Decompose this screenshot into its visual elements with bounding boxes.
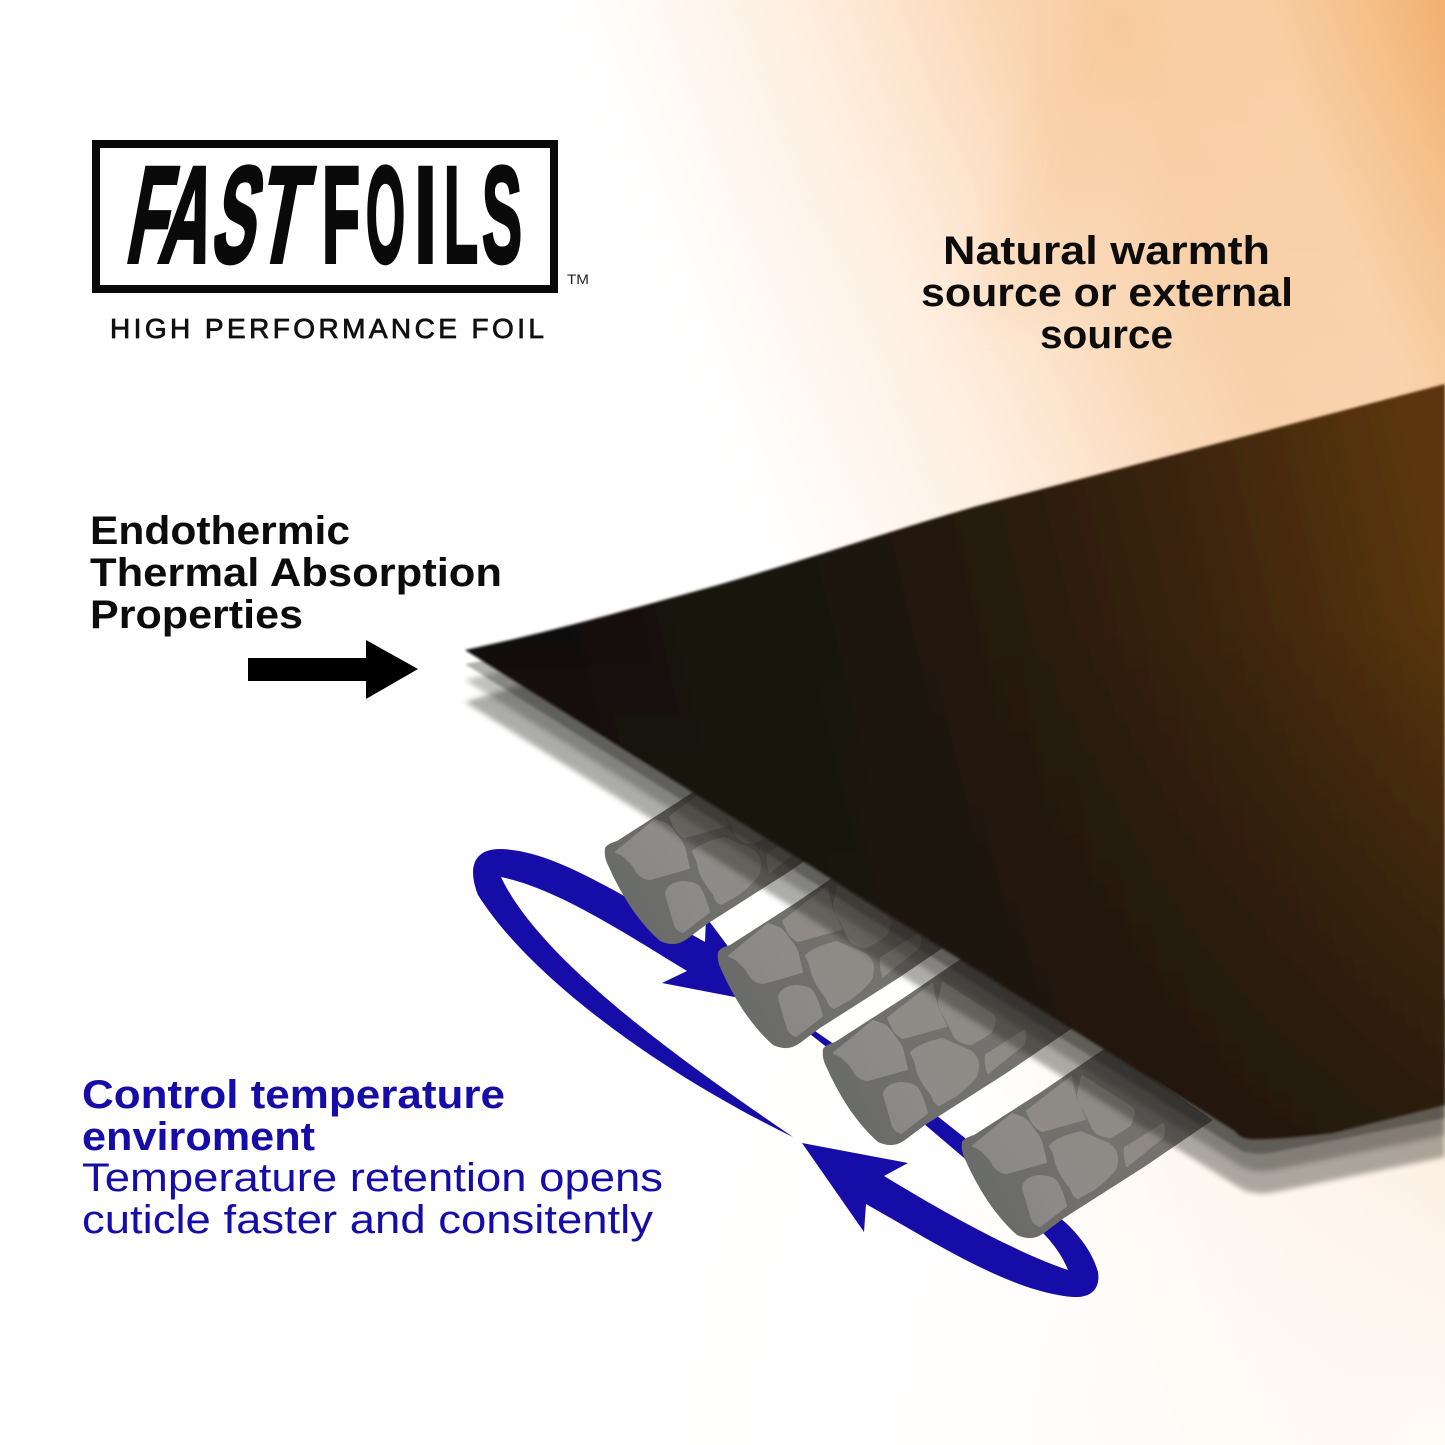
text: control temperature: Temperature retention opens <box>82 1156 663 1200</box>
text: endothermic properties: Endothermic <box>90 509 350 553</box>
lower arrow swirl <box>802 1031 1098 1297</box>
logo: Fast Foils: S <box>482 139 522 292</box>
logo: Fast Foils <box>96 139 589 344</box>
hair section with layered shadow <box>465 384 1445 1193</box>
logo word FAST <box>118 139 322 292</box>
main hair <box>465 384 1445 1139</box>
trademark: TM <box>567 271 589 287</box>
text: natural warmth <box>921 229 1293 357</box>
logo word FOILS: O <box>366 139 405 292</box>
tape 1 <box>605 753 856 944</box>
text: control temperature: Control temperature <box>82 1073 505 1117</box>
text: endothermic properties: Thermal Absorption <box>90 551 502 595</box>
text: control temperature: enviroment <box>82 1115 315 1159</box>
logo word FAST: A <box>151 139 229 292</box>
text: natural warmth: Natural warmth <box>943 229 1270 273</box>
tape 4 <box>962 1047 1213 1238</box>
logo tagline: HIGH PERFORMANCE FOIL <box>110 313 544 344</box>
logo word FOILS: F <box>322 139 360 292</box>
logo word FOILS: I <box>414 139 437 292</box>
logo word FOILS <box>322 139 522 292</box>
far shadow layer <box>465 600 1445 1193</box>
circulation arrows <box>473 849 1098 1297</box>
text: endothermic properties: Properties <box>90 593 303 637</box>
logo word FAST: F <box>118 139 187 292</box>
tape 3 <box>823 954 1074 1145</box>
middle shadow layer <box>465 600 1445 1171</box>
logo word FAST: T <box>248 139 322 292</box>
logo frame <box>96 144 554 289</box>
tape 2 <box>718 857 969 1048</box>
logo word FAST: S <box>203 139 275 292</box>
arrow: pointing at hair <box>248 640 418 699</box>
text: control temperature <box>82 1073 663 1242</box>
logo word FOILS: L <box>444 139 478 292</box>
text: control temperature: cuticle faster and consitently <box>82 1198 653 1242</box>
hair extension tapes <box>605 753 1213 1238</box>
text: endothermic properties <box>90 509 502 637</box>
text: natural warmth: source <box>1040 313 1173 357</box>
near shadow layer <box>465 600 1445 1154</box>
text: natural warmth: source or external <box>921 271 1293 315</box>
upper arrow swirl <box>473 849 793 1137</box>
